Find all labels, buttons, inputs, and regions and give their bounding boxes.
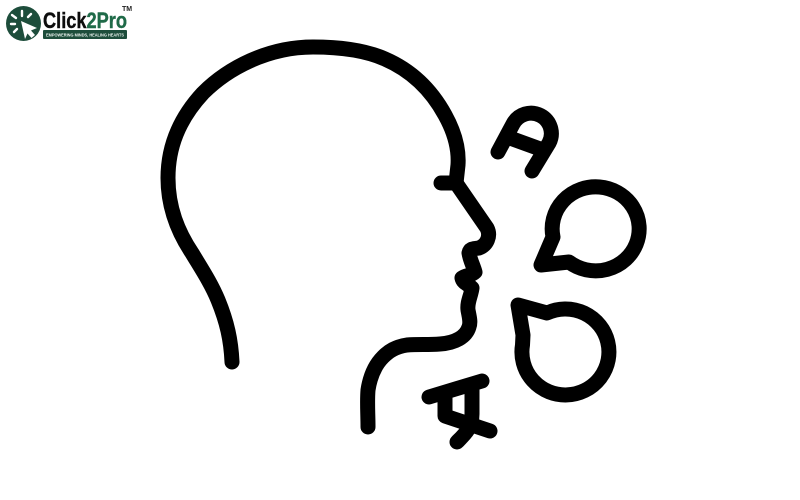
icon: speech bubble lower: [518, 305, 609, 395]
icon: speech bubble upper: [541, 187, 639, 271]
logo wordmark: Click2Pro: [43, 8, 127, 33]
logo tagline banner: EMPOWERING MINDS, HEALING HEARTS: [46, 32, 125, 38]
icon: letter A top: [498, 113, 551, 171]
trademark: TM: [122, 6, 132, 13]
icon: speaking head profile: [168, 47, 489, 427]
logo badge: [6, 6, 41, 41]
logo: Click2Pro: [6, 6, 132, 41]
icon: letter A bottom: [429, 381, 490, 442]
